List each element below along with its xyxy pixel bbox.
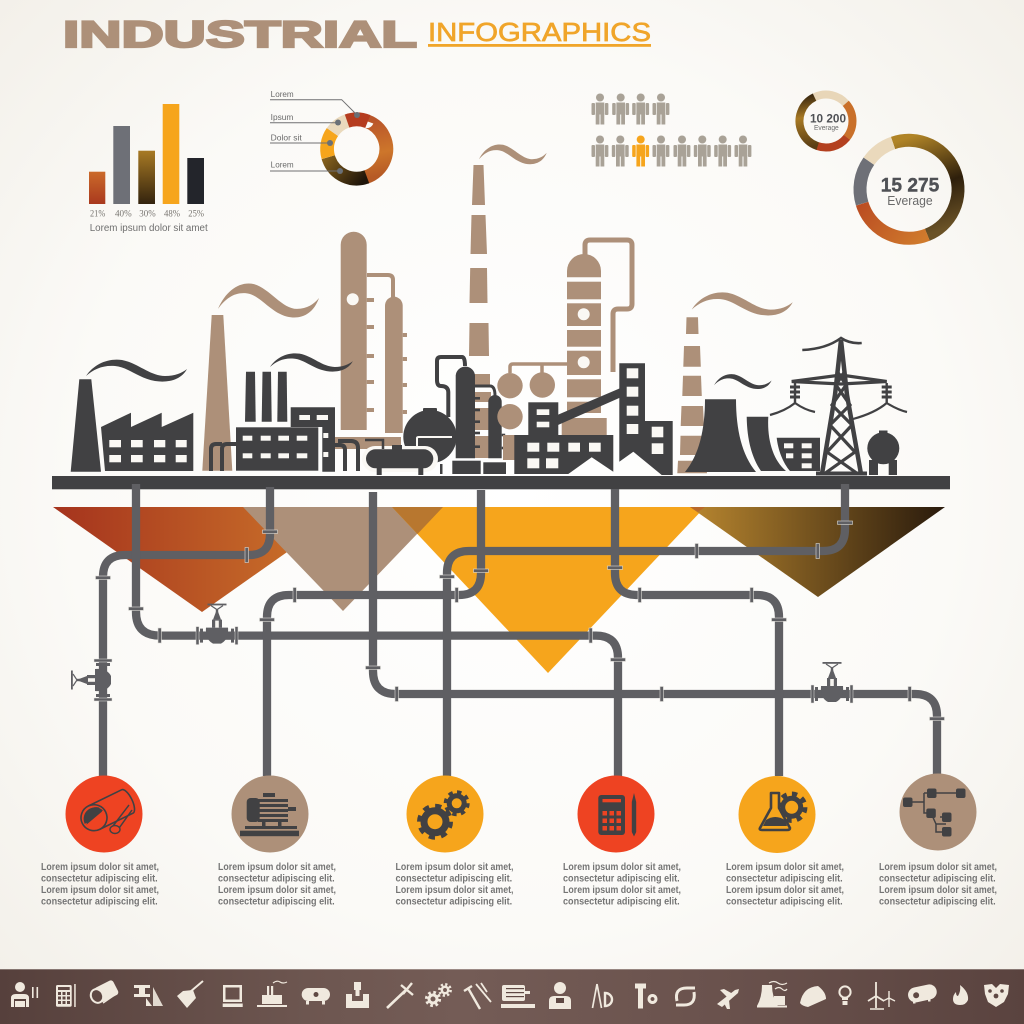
step 3 circle: gears icon: [406, 776, 484, 852]
text block 3: [396, 862, 514, 908]
step 2 circle: motor icon: [232, 776, 308, 852]
tall striped tan chimney: [466, 144, 547, 458]
heading: infographics: INFOGRAPHICS: [428, 17, 651, 47]
donut chart with labels: Lorem: [271, 160, 294, 170]
small ring stat: Everage: [814, 125, 839, 132]
text block 3: Lorem ipsum dolor sit amet,: [396, 885, 514, 896]
icon: airplane: [717, 989, 739, 1009]
icon: wind turbines: [868, 982, 895, 1009]
dark spherical tank and horizontal tank: [362, 408, 457, 475]
text block 6: Lorem ipsum dolor sit amet,: [879, 885, 997, 896]
bar chart: 40%: [115, 208, 132, 218]
platform: [52, 476, 950, 489]
pipe to circle 3: [440, 484, 852, 776]
icon: worker with tools: [11, 982, 38, 1007]
colored triangles: [53, 507, 945, 673]
icon: pipes: [87, 979, 119, 1006]
icon: flame: [953, 985, 968, 1005]
pipe to circle 6: [366, 492, 944, 776]
people pictogram: [592, 94, 751, 166]
icon: hammer and pliers: [464, 983, 491, 1009]
text block 6: Lorem ipsum dolor sit amet,: [879, 862, 997, 873]
step 1 circle: pipes icon: [66, 776, 142, 852]
text block 6: consectetur adipiscing elit.: [879, 874, 996, 885]
icon: factory: [257, 981, 287, 1007]
skyline illustration: [52, 144, 950, 489]
refinery towers tan: [335, 232, 407, 449]
icon: bolt and nut: [635, 984, 657, 1008]
small ring stat: 10 200: [810, 111, 846, 125]
bar chart: [89, 104, 208, 234]
text block 1: [41, 862, 159, 908]
valve right: [811, 662, 853, 703]
icon: drill: [387, 983, 413, 1008]
text block 1: Lorem ipsum dolor sit amet,: [41, 885, 159, 896]
bar chart: 30%: [139, 208, 156, 218]
pipe to circle 1: [96, 487, 278, 776]
bottom icon band: [0, 969, 1024, 1024]
icon: recycle arrows: [676, 988, 695, 1005]
donut chart with labels: Lorem: [271, 90, 294, 99]
tan chimney with smoke: [202, 284, 319, 471]
text block 1: consectetur adipiscing elit.: [41, 897, 158, 908]
text block 2: Lorem ipsum dolor sit amet,: [218, 862, 336, 873]
icon: glove and screwdriver: [177, 981, 203, 1008]
small ring stat: [789, 84, 863, 158]
small building: [777, 438, 820, 471]
icon: engine: [984, 984, 1009, 1007]
icon: motor: [501, 985, 535, 1008]
pipe to circle 5: [608, 489, 786, 776]
step 5 circle: flask and gear icon: [738, 776, 816, 853]
donut chart with labels: [270, 90, 398, 190]
pipe to circle 2: [260, 490, 488, 776]
text block 3: Lorem ipsum dolor sit amet,: [396, 862, 514, 873]
pipe to circle 4: [128, 484, 626, 776]
text block 1: consectetur adipiscing elit.: [41, 874, 158, 885]
text block 5: Lorem ipsum dolor sit amet,: [726, 885, 844, 896]
text block 4: consectetur adipiscing elit.: [563, 874, 680, 885]
large ring stat: Everage: [887, 194, 933, 208]
icon: machine press: [346, 982, 369, 1008]
striped tan chimney right: [677, 292, 793, 473]
cooling towers: [685, 374, 786, 472]
dark conveyor factory: [514, 363, 673, 475]
large ring stat: [841, 121, 977, 258]
three stack factory: [211, 353, 358, 472]
text block 4: Lorem ipsum dolor sit amet,: [563, 885, 681, 896]
text block 4: consectetur adipiscing elit.: [563, 897, 680, 908]
bar chart: Lorem ipsum dolor sit amet: [90, 223, 208, 234]
valve on left pipe: [71, 659, 112, 701]
icon: calculator: [56, 984, 76, 1007]
icon: tank: [302, 988, 330, 1004]
text block 6: consectetur adipiscing elit.: [879, 897, 996, 908]
text block 2: [218, 862, 336, 908]
text block 4: [563, 862, 681, 908]
icon: power plant: [757, 982, 787, 1008]
bar chart: 25%: [188, 208, 204, 218]
donut chart with labels: Dolor sit: [271, 134, 303, 142]
icon: gears: [426, 984, 451, 1006]
icon: drawing compass: [592, 984, 612, 1008]
text block 5: Lorem ipsum dolor sit amet,: [726, 862, 844, 873]
small round tank: [867, 430, 899, 475]
text block 1: Lorem ipsum dolor sit amet,: [41, 862, 159, 873]
text block 5: consectetur adipiscing elit.: [726, 874, 843, 885]
heading: industrial: INDUSTRIAL: [63, 14, 417, 55]
text block 5: [726, 862, 844, 908]
icon: hard hat: [800, 986, 826, 1007]
text block 2: consectetur adipiscing elit.: [218, 897, 335, 908]
text block 2: consectetur adipiscing elit.: [218, 874, 335, 885]
donut chart with labels: Ipsum: [271, 113, 294, 122]
icon: boiler tank: [907, 983, 938, 1004]
text block 2: Lorem ipsum dolor sit amet,: [218, 885, 336, 896]
text block 5: consectetur adipiscing elit.: [726, 897, 843, 908]
large ring stat: 15 275: [881, 175, 939, 197]
pipe network: [71, 484, 944, 776]
power pylon: [770, 338, 907, 474]
icon: worker with helmet: [549, 982, 571, 1009]
text block 3: consectetur adipiscing elit.: [396, 897, 512, 908]
step 4 circle: calculator icon: [578, 776, 654, 852]
icon: light bulb: [839, 986, 851, 1005]
text block 6: [879, 862, 997, 908]
valve top left: [196, 604, 238, 645]
sawtooth factory: [101, 413, 193, 471]
dark distillation towers: [437, 357, 506, 474]
chimney and smoke dark left: [71, 360, 187, 472]
bar chart: 21%: [90, 208, 106, 218]
step 6 circle: flowchart icon: [900, 774, 976, 850]
icon: computer: [223, 985, 243, 1007]
text block 3: consectetur adipiscing elit.: [396, 874, 512, 885]
icon: steel beams: [134, 985, 163, 1006]
tan segmented column with pipes and spheres: [497, 240, 632, 460]
title: [63, 14, 651, 55]
text block 4: Lorem ipsum dolor sit amet,: [563, 862, 681, 873]
bar chart: 48%: [164, 208, 180, 218]
